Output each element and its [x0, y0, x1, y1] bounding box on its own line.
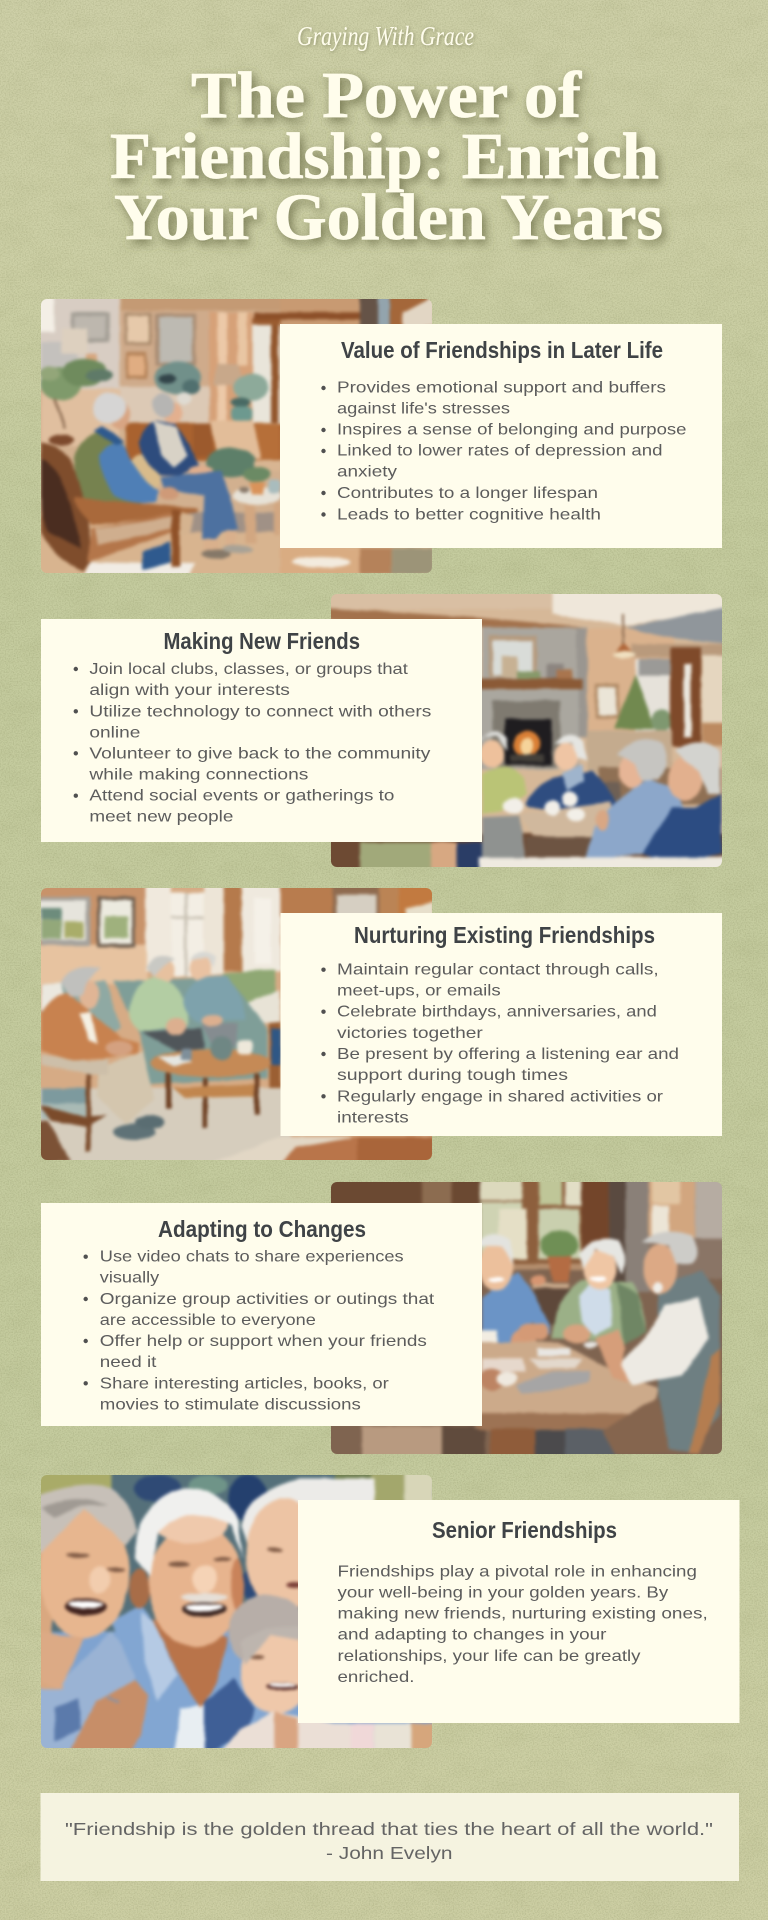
heading: Adapting to Changes [158, 1216, 366, 1242]
illustration: seniors playing cards [331, 1182, 722, 1454]
illustration: two seniors on a sofa in a living room [41, 299, 432, 573]
bullet list: Maintain regular contact through calls, [337, 962, 659, 979]
bullet list: align with your interests [89, 682, 290, 699]
logo text: Graying With Grace [297, 21, 474, 51]
heading: Nurturing Existing Friendships [354, 922, 655, 948]
quote box: - John Evelyn [326, 1843, 452, 1863]
title [110, 59, 663, 254]
illustration: three women chatting around a coffee table [41, 888, 432, 1160]
heading: Value of Friendships in Later Life [341, 337, 663, 363]
panel: senior friendships [31, 1465, 740, 1755]
bullet list: Linked to lower rates of depression and [337, 443, 662, 460]
paragraph: enriched. [338, 1669, 414, 1686]
illustration: friends at a table by a fireplace [331, 594, 722, 867]
bullet list: Provides emotional support and buffers [337, 380, 666, 397]
quote box: "Friendship is the golden thread that ties the heart of all the world." [65, 1819, 713, 1839]
bullet list: online [89, 724, 140, 741]
bullet list: Leads to better cognitive health [337, 506, 601, 523]
bullet list: Volunteer to give back to the community [89, 745, 431, 762]
paragraph: making new friends, nurturing existing ones, [338, 1606, 708, 1623]
illustration: laughing senior friends [41, 1475, 432, 1748]
bullet list: Share interesting articles, books, or [100, 1375, 389, 1392]
bullet list: anxiety [337, 464, 397, 481]
panel: nurturing existing friendships [31, 878, 722, 1175]
quote box [40, 1793, 739, 1881]
bullet list: victories together [337, 1025, 483, 1042]
bullet list: interests [337, 1109, 409, 1126]
bullet list: Be present by offering a listening ear and [337, 1046, 679, 1063]
bullet list: Join local clubs, classes, or groups that [89, 661, 409, 678]
bullet list [321, 380, 686, 523]
panel: making new friends [41, 584, 732, 877]
bullet list: support during tough times [337, 1067, 568, 1084]
bullet list: Celebrate birthdays, anniversaries, and [337, 1004, 657, 1021]
panel: value of friendships [31, 289, 722, 586]
bullet list: Utilize technology to connect with others [89, 703, 432, 720]
bullet list: need it [100, 1354, 157, 1371]
bullet list: Use video chats to share experiences [100, 1249, 404, 1266]
bullet list: are accessible to everyone [100, 1312, 316, 1329]
bullet list [84, 1249, 435, 1413]
bullet list: Offer help or support when your friends [100, 1333, 427, 1350]
text card [280, 324, 722, 548]
bullet list: movies to stimulate discussions [100, 1396, 361, 1413]
bullet list: Contributes to a longer lifespan [337, 485, 598, 502]
title: Your Golden Years [114, 181, 663, 254]
bullet list: visually [100, 1270, 159, 1287]
text card [41, 1203, 482, 1426]
bullet list: against life's stresses [337, 401, 510, 418]
title: Friendship: Enrich [110, 120, 659, 193]
paragraph: and adapting to changes in your [338, 1627, 606, 1644]
bullet list: Organize group activities or outings that [100, 1291, 435, 1308]
paragraph: relationships, your life can be greatly [338, 1648, 641, 1665]
bullet list: while making connections [88, 766, 309, 783]
text card [298, 1500, 740, 1723]
heading: Senior Friendships [432, 1517, 617, 1543]
paragraph [338, 1563, 708, 1686]
bullet list [321, 962, 679, 1126]
bullet list [74, 661, 432, 826]
heading: Making New Friends [164, 628, 360, 654]
bullet list: Attend social events or gatherings to [89, 788, 395, 805]
panel: adapting to changes [41, 1172, 732, 1465]
bullet list: meet-ups, or emails [337, 983, 501, 1000]
bullet list: Inspires a sense of belonging and purpose [337, 422, 686, 439]
paragraph: your well-being in your golden years. By [338, 1584, 668, 1601]
text card [280, 913, 722, 1136]
bullet list: meet new people [89, 809, 233, 826]
bullet list: Regularly engage in shared activities or [337, 1088, 663, 1105]
paragraph: Friendships play a pivotal role in enhancing [338, 1563, 697, 1580]
title: The Power of [191, 59, 582, 132]
text card [41, 619, 482, 842]
